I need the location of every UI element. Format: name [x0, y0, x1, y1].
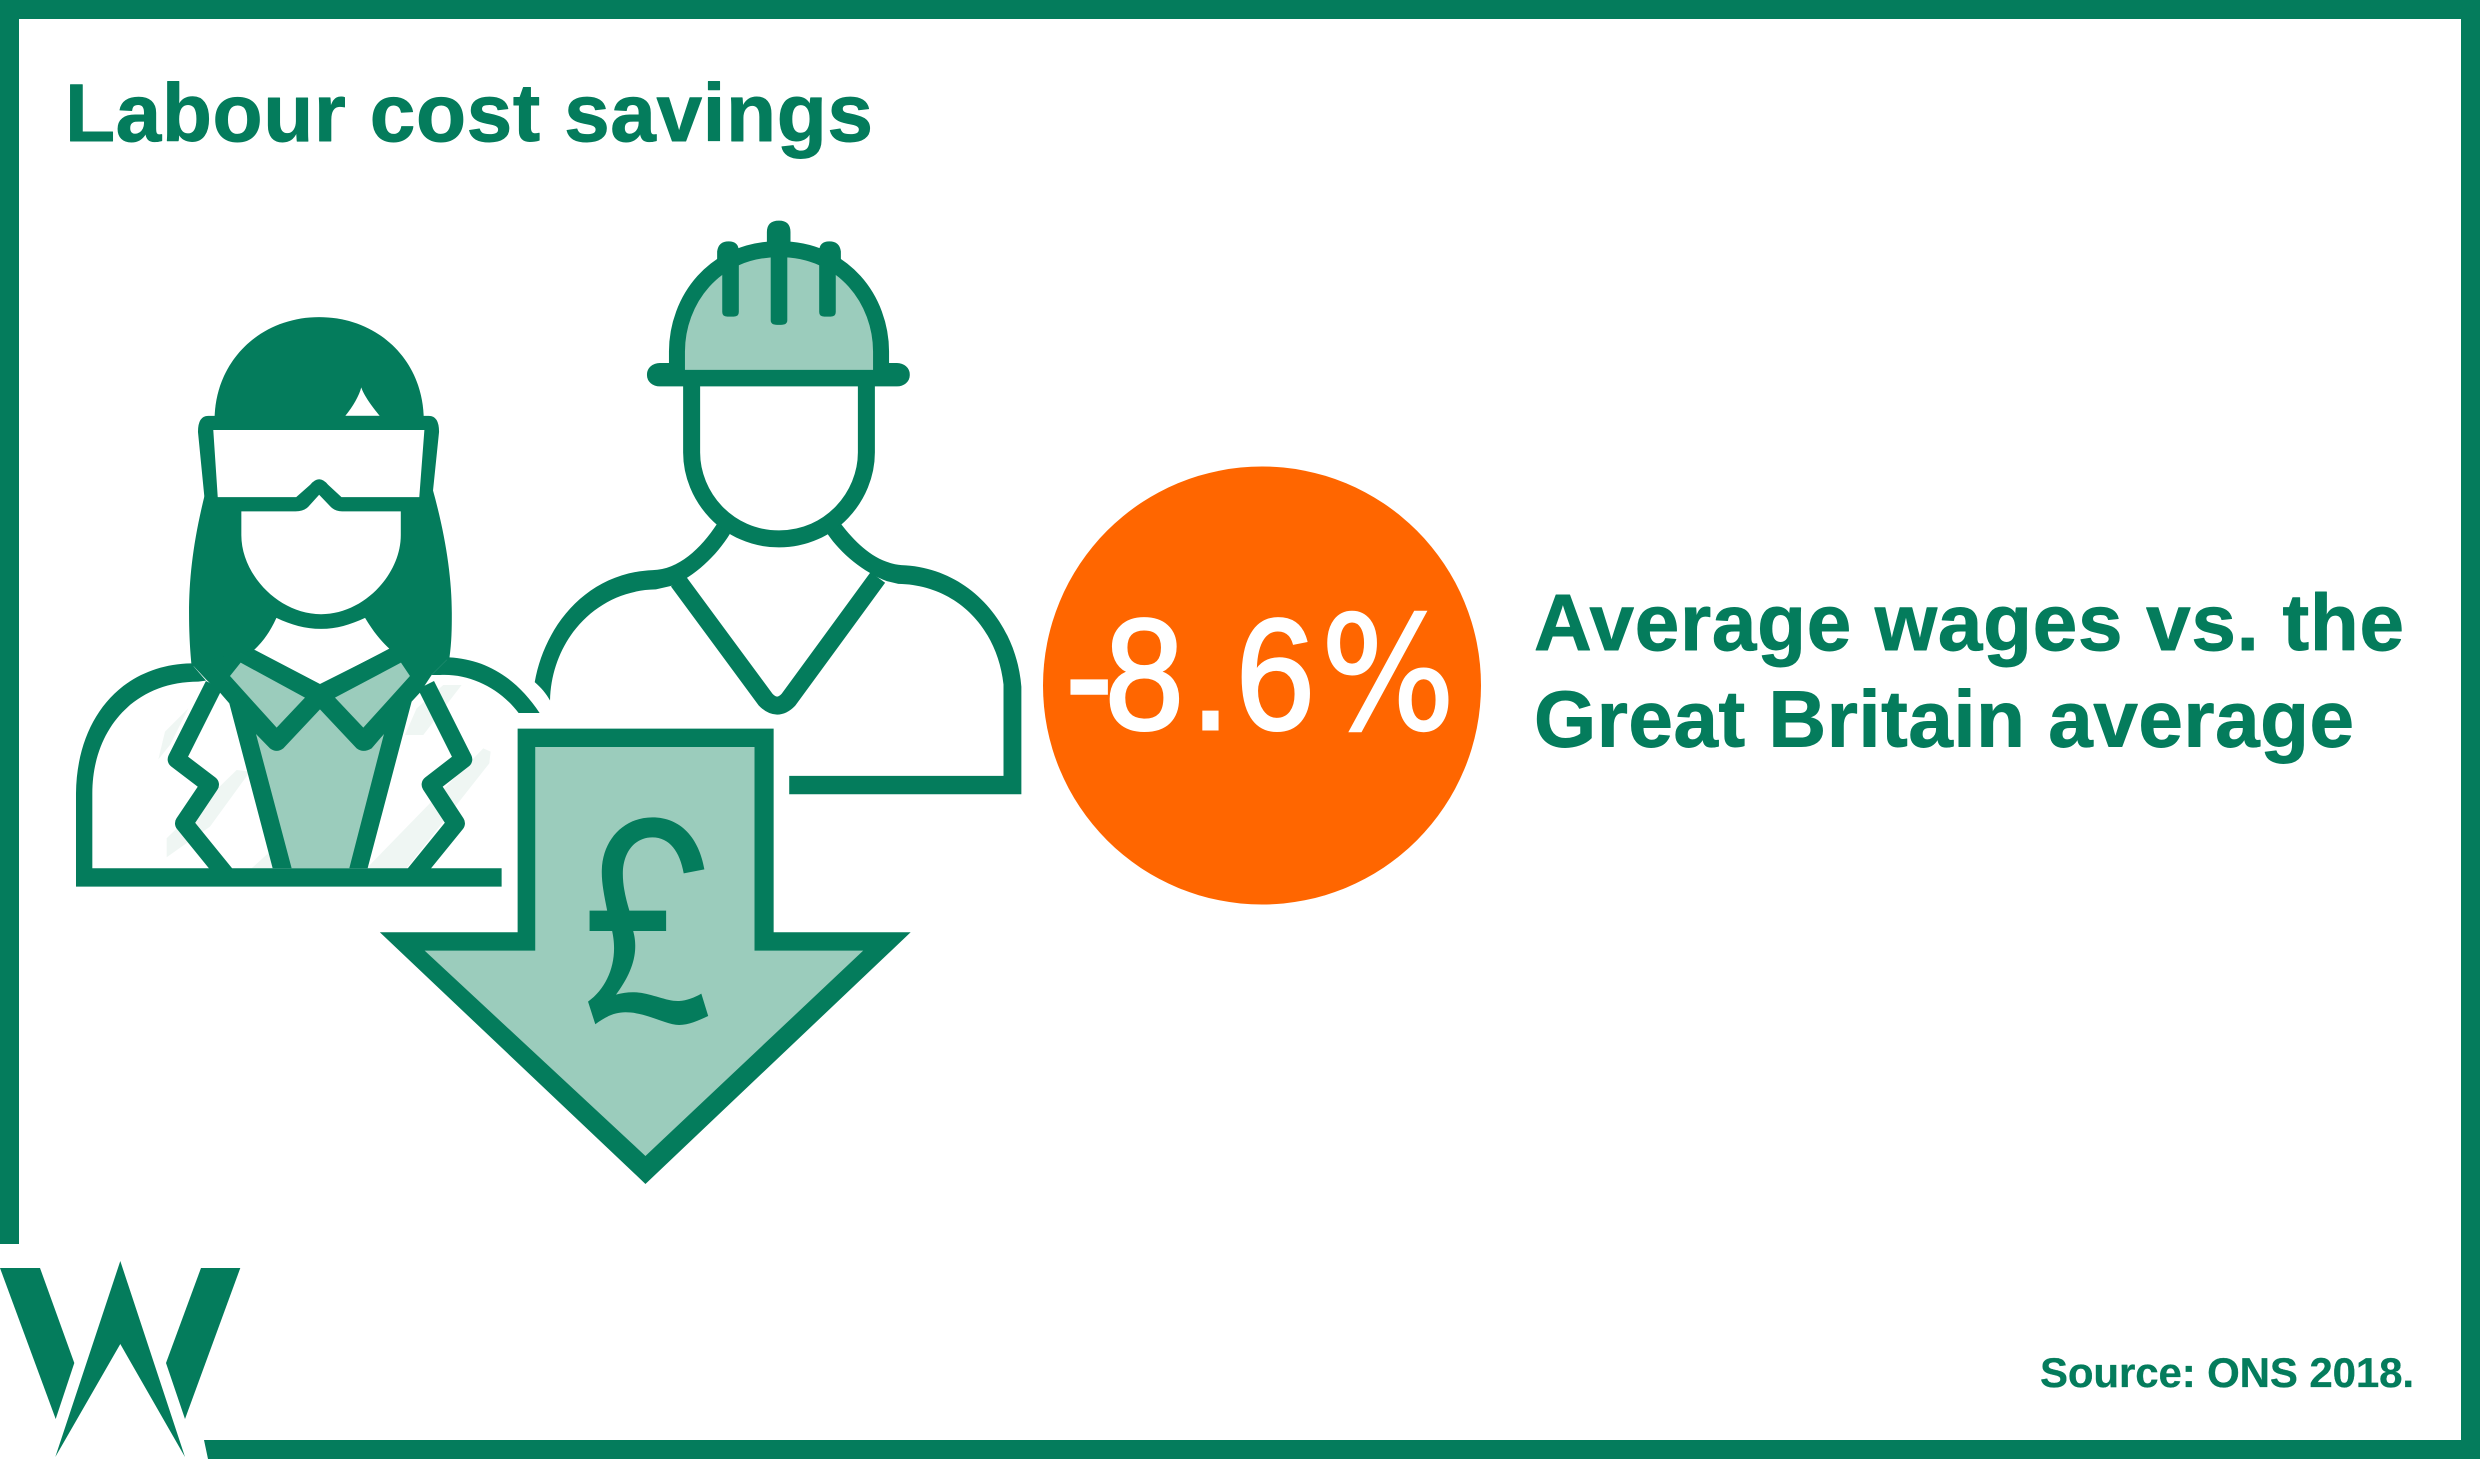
logo right stroke [166, 1268, 240, 1419]
arrow fill [425, 747, 863, 1156]
hard hat outline [677, 249, 881, 371]
circle [1043, 466, 1481, 904]
statistic description [1534, 578, 2404, 764]
right shoulder [432, 657, 540, 713]
right lapel [411, 685, 463, 878]
hat centre rib [767, 221, 790, 325]
v-neck [678, 577, 878, 706]
visor frame [198, 416, 439, 511]
neck [254, 618, 389, 684]
head and hair [189, 317, 452, 687]
orange statistic circle [1043, 466, 1481, 904]
faint jacket shading [158, 685, 491, 868]
right shoulder and base line [789, 524, 1021, 794]
face [241, 495, 401, 614]
icon: male worker with hard hat [535, 221, 1021, 794]
logo left stroke [0, 1268, 74, 1419]
line two: Great Britain average [1534, 674, 2354, 764]
shirt [256, 709, 384, 868]
hard hat dome [677, 249, 881, 370]
icon: female worker with safety visor [76, 317, 540, 887]
left shoulder [535, 524, 730, 701]
hat left rib [717, 241, 739, 317]
logo [0, 1261, 240, 1457]
line one: Average wages vs. the [1534, 578, 2404, 667]
hair parting [345, 387, 380, 416]
pound symbol [588, 817, 708, 1025]
statistic value: % [1320, 583, 1455, 767]
title: Labour cost savings [65, 68, 873, 159]
left lapel [177, 685, 229, 878]
hair top [215, 317, 424, 420]
head outline [692, 386, 866, 539]
hat brim [647, 363, 910, 386]
right collar [335, 663, 410, 728]
left shoulder and base line [76, 663, 502, 887]
long hair [189, 489, 452, 687]
statistic value: -8.6 [1066, 586, 1315, 763]
logo centre peak [55, 1261, 185, 1457]
hat right rib [819, 241, 841, 317]
jacket and shirt [76, 649, 540, 887]
visor lens [213, 430, 424, 497]
left collar [230, 663, 305, 728]
arrow outline [380, 729, 911, 1184]
source note: Source: ONS 2018. [2040, 1349, 2414, 1396]
collar and torso outline [191, 649, 449, 868]
icon: down arrow with pound sign [380, 729, 911, 1184]
